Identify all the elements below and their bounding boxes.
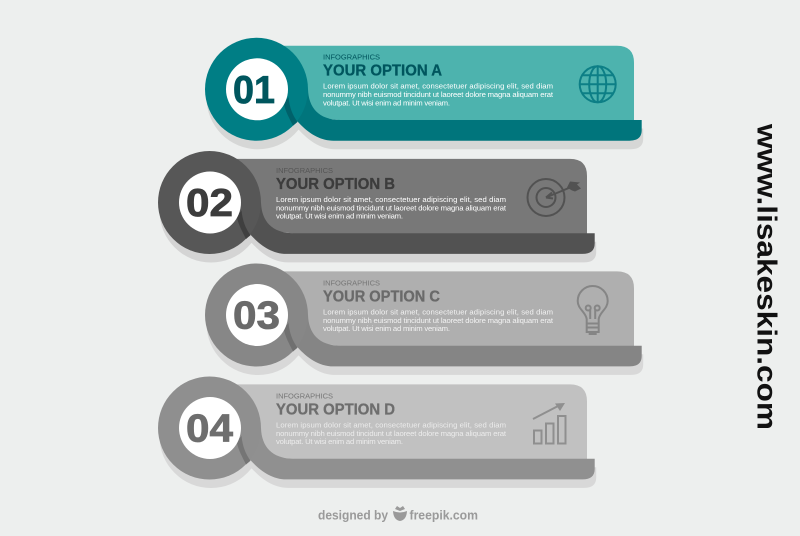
drop shadow B [160, 160, 596, 262]
icon: light bulb [578, 286, 608, 335]
card body C [256, 271, 634, 346]
body text D: volutpat. Ut wisi enim ad minim veniam. [276, 437, 403, 446]
eyebrow C: INFOGRAPHICS [323, 278, 380, 287]
body text C: volutpat. Ut wisi enim ad minim veniam. [323, 324, 450, 333]
footer credit [318, 506, 478, 522]
number ring D [158, 376, 261, 480]
heading B: YOUR OPTION B [276, 176, 395, 193]
body text D: Lorem ipsum dolor sit amet, consectetuer adipiscing elit, sed diam [276, 420, 506, 429]
body text B: Lorem ipsum dolor sit amet, consectetuer adipiscing elit, sed diam [276, 195, 506, 204]
number disc D [179, 397, 241, 459]
card body D [210, 384, 587, 459]
ring fold C [284, 323, 298, 352]
drop shadow D [160, 385, 596, 488]
eyebrow D: INFOGRAPHICS [276, 391, 333, 400]
panel: option B [158, 151, 596, 262]
panel: option D [158, 376, 596, 488]
card body A [256, 46, 634, 120]
vertical website address: www.lisakeskin.com [752, 123, 782, 430]
number 02: 02 [186, 182, 233, 225]
number 01: 01 [233, 69, 275, 112]
ribbon band B [210, 202, 595, 254]
icon: target [528, 179, 581, 216]
body text B: nonummy nibh euismod tincidunt ut laoreet dolore magna aliquam erat [276, 203, 507, 212]
body text B: volutpat. Ut wisi enim ad minim veniam. [276, 212, 403, 220]
body text D: nonummy nibh euismod tincidunt ut laoreet dolore magna aliquam erat [276, 429, 507, 438]
icon: freepik crown [393, 506, 407, 521]
panel: option C [205, 264, 643, 375]
credit text right: freepik.com [410, 508, 478, 522]
ribbon band C [256, 315, 642, 366]
body text C [323, 307, 554, 333]
number 04: 04 [186, 408, 233, 451]
body text C: Lorem ipsum dolor sit amet, consectetuer adipiscing elit, sed diam [323, 307, 553, 316]
ring fold A [284, 97, 298, 126]
heading A: YOUR OPTION A [323, 63, 442, 80]
number ring B [158, 151, 261, 254]
body text C: nonummy nibh euismod tincidunt ut laoreet dolore magna aliquam erat [323, 316, 554, 325]
number 03: 03 [233, 295, 280, 338]
card body B [210, 159, 587, 234]
heading D: YOUR OPTION D [276, 401, 395, 418]
drop shadow C [206, 272, 643, 375]
icon: rising bar chart [533, 403, 566, 444]
eyebrow B: INFOGRAPHICS [276, 166, 333, 175]
credit text left: designed by [318, 508, 389, 522]
ring fold B [236, 210, 250, 239]
body text A [323, 82, 554, 107]
number disc C [226, 284, 288, 346]
body text A: nonummy nibh euismod tincidunt ut laoreet dolore magna aliquam erat [323, 90, 554, 99]
number disc A [226, 58, 288, 120]
body text D [276, 420, 507, 446]
number disc B [179, 172, 241, 234]
body text B [276, 195, 507, 220]
ring fold D [236, 436, 250, 464]
icon: globe [580, 66, 616, 102]
eyebrow A: INFOGRAPHICS [323, 53, 380, 62]
heading C: YOUR OPTION C [323, 288, 440, 305]
ribbon band A [256, 89, 642, 141]
body text A: volutpat. Ut wisi enim ad minim veniam. [323, 98, 450, 107]
body text A: Lorem ipsum dolor sit amet, consectetuer adipiscing elit, sed diam [323, 82, 553, 91]
number ring C [205, 264, 308, 366]
drop shadow A [206, 46, 643, 149]
ribbon band D [210, 428, 595, 479]
panel: option A [205, 38, 643, 149]
number ring A [205, 38, 308, 141]
